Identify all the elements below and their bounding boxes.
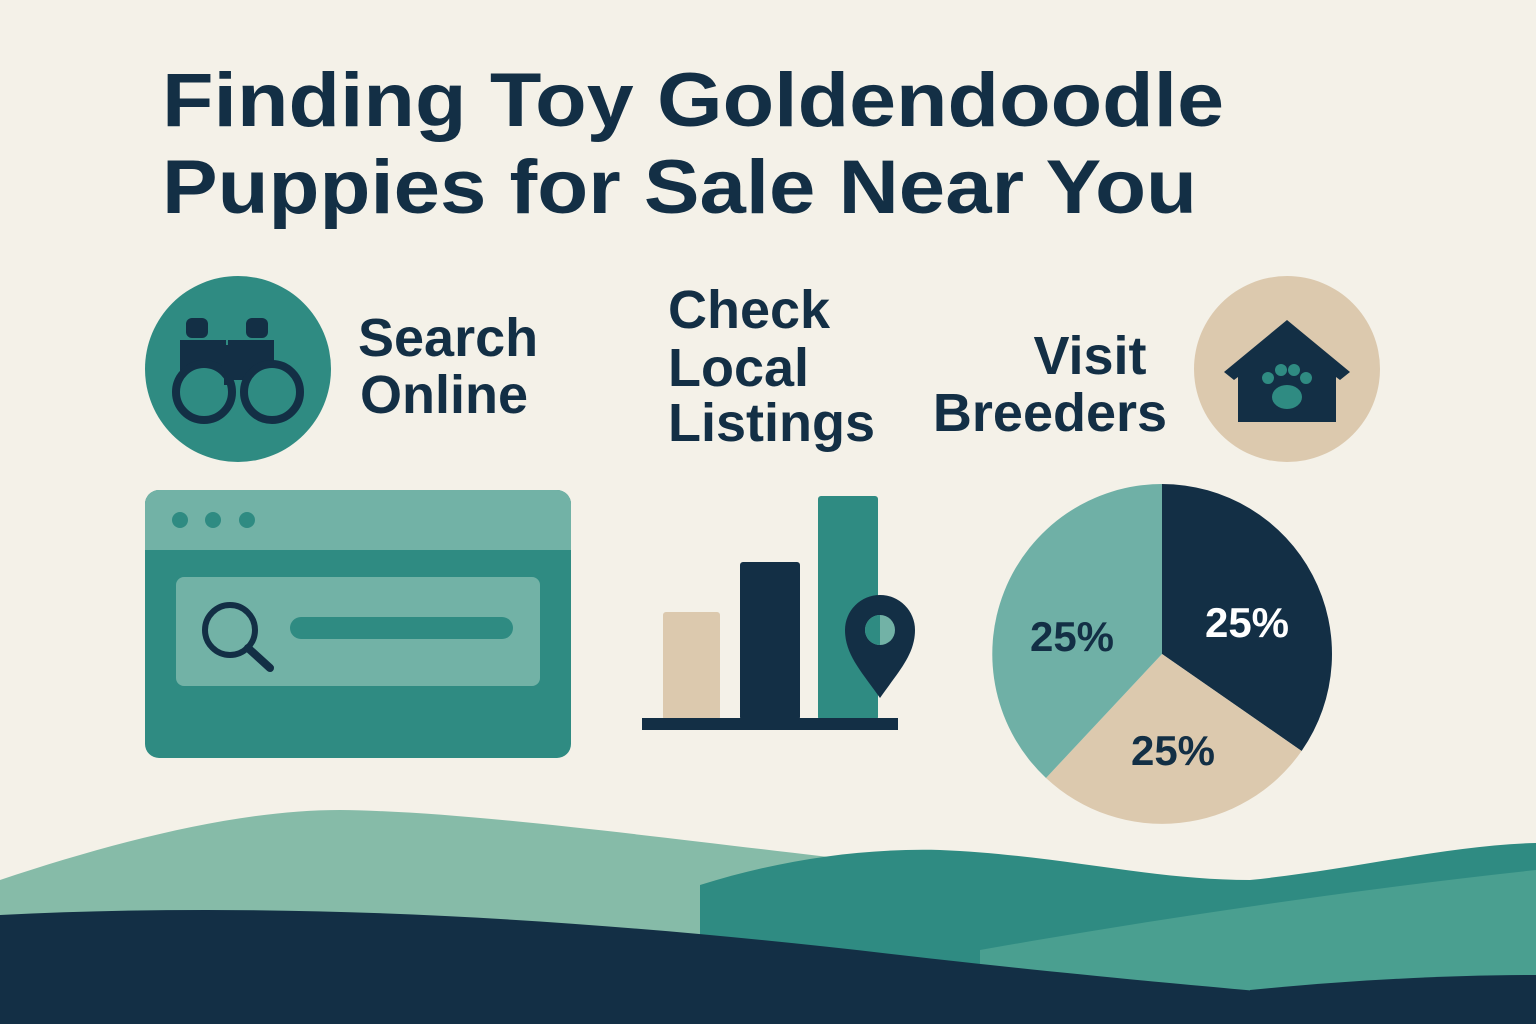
heading: Visit Breeders: Visit [1033, 326, 1147, 386]
title: Puppies for Sale Near You [162, 145, 1197, 230]
heading: Search Online: Search [358, 308, 538, 368]
browser window [145, 490, 571, 758]
hills [0, 810, 1536, 1024]
icon: house with paw circle [1194, 276, 1380, 462]
heading: Check Local Listings: Listings [668, 393, 875, 453]
pie chart: 25% [1030, 613, 1114, 660]
title [162, 58, 1224, 230]
bar chart with location pin [642, 496, 915, 730]
heading: Check Local Listings: Local [668, 338, 809, 398]
heading: Check Local Listings [668, 280, 875, 453]
heading: Search Online: Online [360, 365, 528, 425]
heading: Search Online [358, 308, 538, 425]
pie chart: 25% [1205, 599, 1289, 646]
heading: Visit Breeders [933, 326, 1167, 443]
pie chart: 25% [1131, 727, 1215, 774]
heading: Check Local Listings: Check [668, 280, 831, 340]
icon: binoculars circle [145, 276, 331, 462]
heading: Visit Breeders: Breeders [933, 383, 1167, 443]
pie chart [992, 484, 1332, 824]
title: Finding Toy Goldendoodle [162, 58, 1224, 143]
